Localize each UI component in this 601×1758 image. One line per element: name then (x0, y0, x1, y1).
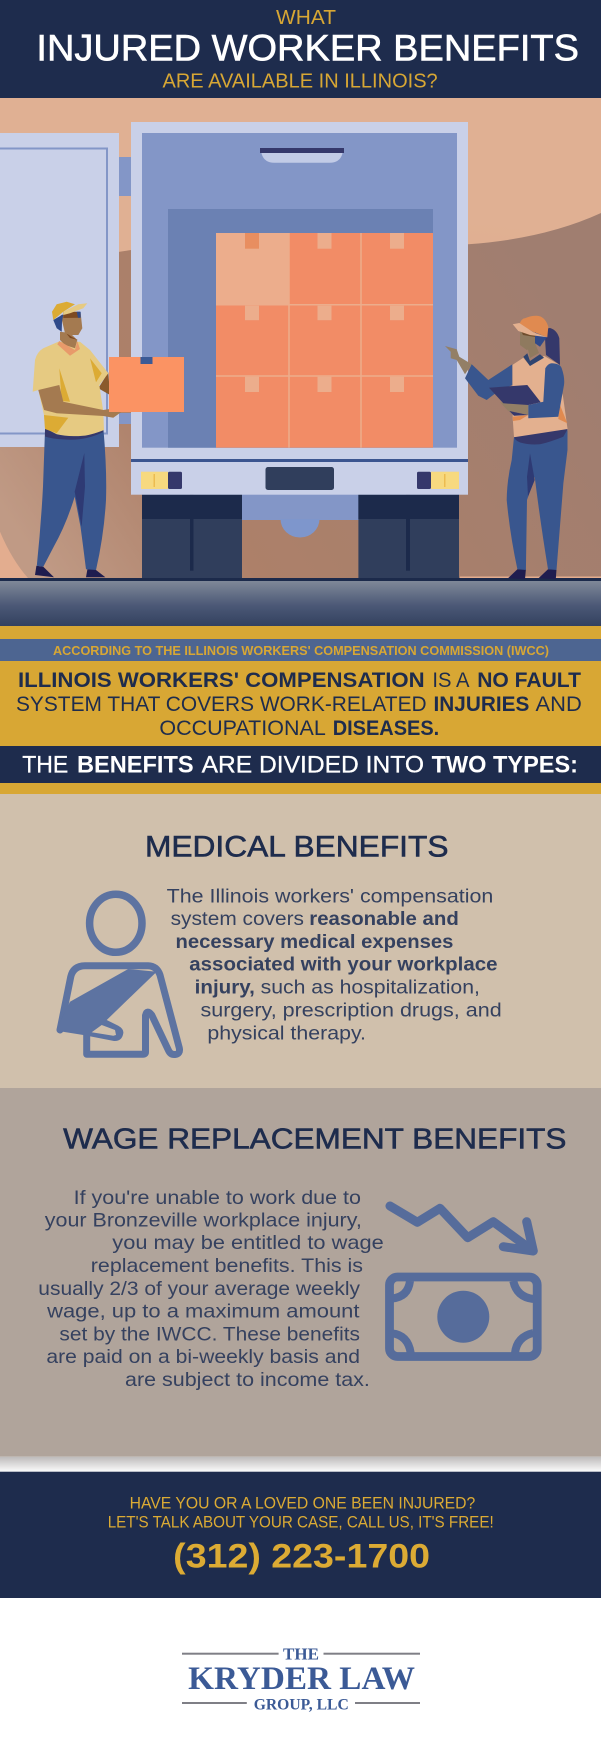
body text: wage replacement: usually 2/3 of your average weekly (38, 1278, 360, 1300)
intro statement: DISEASES. (333, 716, 439, 740)
two types heading: BENEFITS (77, 752, 194, 778)
header banner: ARE AVAILABLE IN ILLINOIS? (162, 69, 438, 92)
two types heading (0, 746, 601, 783)
logo: The Kryder Law Group, LLC: KRYDER LAW (188, 1661, 415, 1697)
gold band (0, 626, 601, 639)
two types heading: THE (22, 752, 68, 778)
stacked cargo boxes (216, 233, 433, 448)
body text: medical benefits: necessary medical expenses (176, 931, 454, 953)
body text: medical benefits (167, 885, 502, 1044)
gold divider (0, 783, 601, 794)
truck body (131, 122, 468, 578)
body text: medical benefits: reasonable and (309, 908, 459, 930)
body text: medical benefits: such as hospitalization, (261, 976, 480, 998)
body text: medical benefits: physical therapy. (207, 1022, 366, 1044)
panel: wage replacement benefits (0, 1088, 601, 1457)
intro statement: OCCUPATIONAL (159, 716, 326, 740)
intro statement: IS A (432, 668, 470, 692)
header banner: INJURED WORKER BENEFITS (36, 28, 579, 69)
heading: wage replacement benefits: WAGE REPLACEMENT BENEFITS (63, 1123, 566, 1155)
open truck door panel (0, 133, 131, 447)
illustration: truck loading scene (0, 98, 601, 626)
body text: wage replacement: If you're unable to work due to (74, 1187, 361, 1209)
panel: medical benefits (0, 794, 601, 1088)
icon: banknote (390, 1277, 537, 1356)
call to action (0, 1472, 601, 1598)
intro statement: AND (536, 692, 582, 716)
logo: The Kryder Law Group, LLC: GROUP, LLC (254, 1696, 349, 1713)
body text: wage replacement: you may be entitled to wage (112, 1232, 384, 1254)
intro statement (0, 661, 601, 746)
icon: falling wage arrow (390, 1206, 533, 1251)
body text: wage replacement: wage, up to a maximum amount (46, 1301, 360, 1323)
header banner: WHAT (276, 7, 336, 29)
body text: medical benefits: surgery, prescription drugs, and (200, 1000, 502, 1022)
source strip: IWCC: ACCORDING TO THE ILLINOIS WORKERS' COMPENSATION COMMISSION (IWCC) (53, 643, 549, 658)
intro statement: INJURIES (434, 692, 529, 716)
body text: wage replacement: are subject to income tax. (125, 1369, 370, 1391)
call to action: (312) 223-1700 (173, 1537, 430, 1575)
body text: wage replacement: replacement benefits. This is (91, 1255, 363, 1277)
right worker with clipboard (445, 316, 568, 579)
call to action: LET'S TALK ABOUT YOUR CASE, CALL US, IT'S FREE! (108, 1513, 494, 1532)
heading: medical benefits: MEDICAL BENEFITS (145, 831, 448, 864)
body text: wage replacement: are paid on a bi-weekly basis and (46, 1346, 360, 1368)
road (0, 578, 601, 626)
shadow strip (0, 1457, 601, 1472)
intro statement: NO FAULT (477, 668, 581, 692)
body text: wage replacement (38, 1187, 384, 1391)
two types heading: ARE DIVIDED INTO (202, 752, 424, 778)
body text: medical benefits: associated with your workplace (189, 953, 498, 975)
header banner (0, 0, 601, 98)
intro statement: SYSTEM THAT COVERS WORK-RELATED (16, 692, 427, 716)
body text: wage replacement: your Bronzeville workplace injury, (45, 1210, 362, 1232)
body text: medical benefits: injury, (195, 976, 255, 998)
carried parcel (109, 357, 184, 412)
logo: The Kryder Law Group, LLC: THE (283, 1645, 319, 1664)
body text: wage replacement: set by the IWCC. These benefits (59, 1324, 360, 1346)
call to action: HAVE YOU OR A LOVED ONE BEEN INJURED? (130, 1494, 475, 1513)
body text: medical benefits: system covers (171, 908, 304, 930)
intro statement: ILLINOIS WORKERS' COMPENSATION (18, 668, 425, 692)
left worker carrying box (33, 302, 184, 577)
two types heading: TWO TYPES: (432, 752, 578, 778)
logo: The Kryder Law Group, LLC (182, 1645, 420, 1713)
icon: arm in sling (57, 894, 180, 1055)
body text: medical benefits: The Illinois workers' compensation (167, 885, 493, 907)
source strip: IWCC (0, 639, 601, 661)
